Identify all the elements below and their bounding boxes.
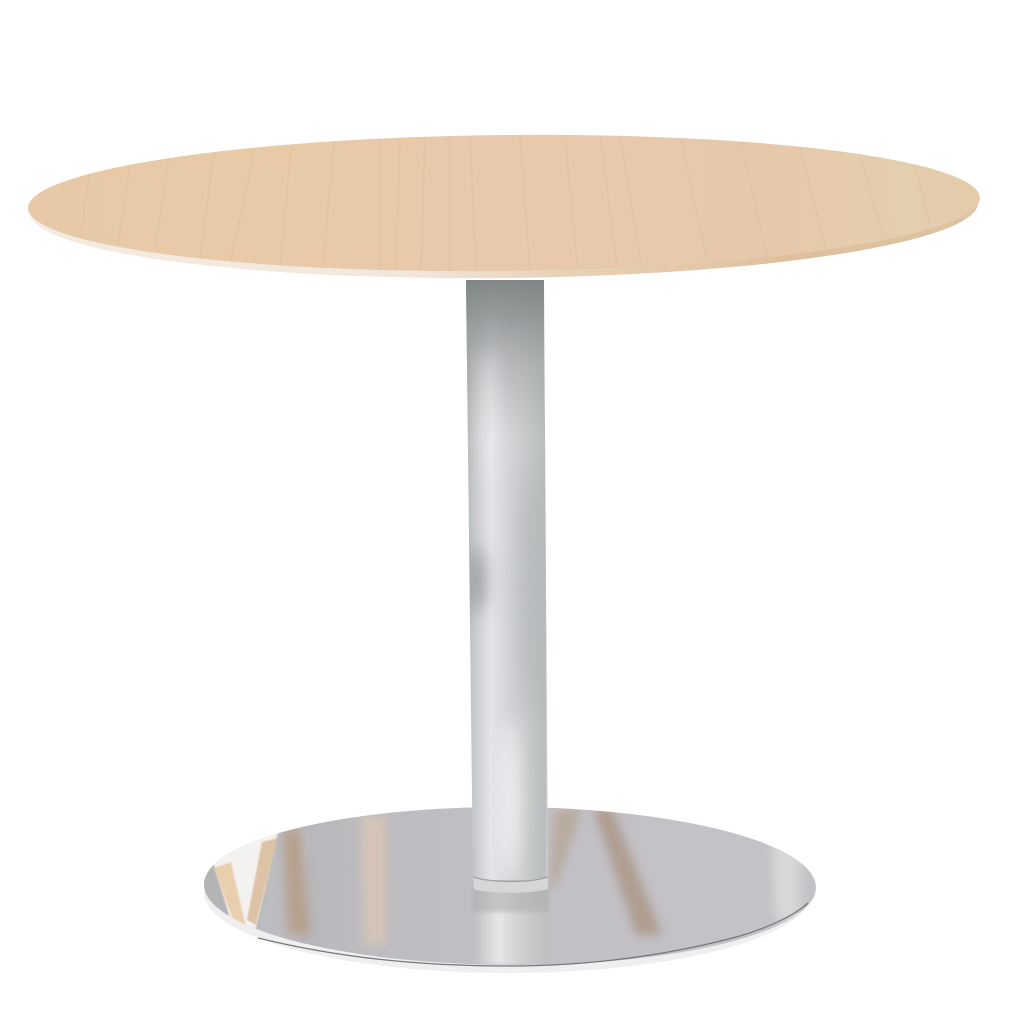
table top surface	[27, 130, 981, 276]
product illustration: round pedestal table	[28, 134, 980, 973]
table column	[466, 280, 548, 893]
table base: steel disc	[200, 805, 816, 973]
column body	[466, 280, 548, 880]
wood grain	[80, 135, 930, 272]
base rim	[204, 811, 812, 973]
column collar	[473, 877, 548, 893]
base lower edge line	[258, 903, 808, 966]
table top	[27, 130, 981, 283]
table top edge	[29, 133, 979, 283]
column shading	[466, 280, 544, 880]
base reflections	[200, 808, 800, 965]
base top surface	[204, 805, 816, 967]
